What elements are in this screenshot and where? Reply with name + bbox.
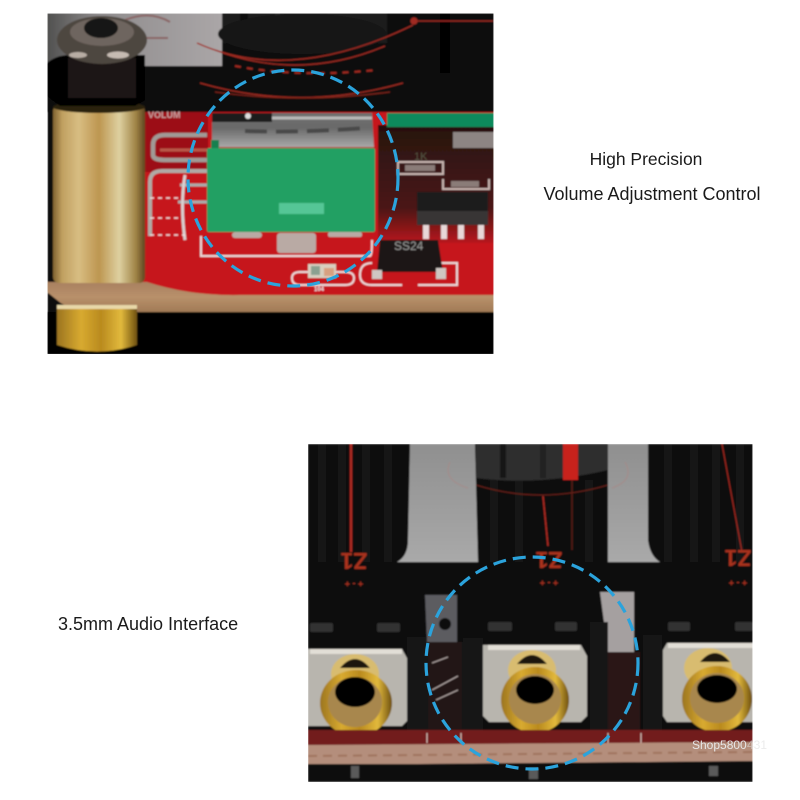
ribbed black panels xyxy=(318,444,744,562)
caption: 3.5mm audio interface: 3.5mm Audio Interface xyxy=(58,614,238,634)
caption: high precision volume adjustment control xyxy=(543,149,761,204)
black band with upside-down labels: Z1 xyxy=(535,547,562,573)
black band with upside-down labels: Z1 xyxy=(340,548,367,574)
photo: volume potentiometer on red circuit board xyxy=(47,13,494,354)
photo: 3.5mm audio jacks on circuit board xyxy=(308,444,753,782)
silk-screen outlines xyxy=(201,162,489,285)
black washer band xyxy=(47,55,145,106)
black band with upside-down labels: + - + xyxy=(345,579,363,589)
grey acrylic panel, top left xyxy=(47,13,222,69)
watermark: Shop5800 xyxy=(692,738,747,752)
dashed blue highlight circle xyxy=(426,557,638,769)
brass standoff, lower xyxy=(57,307,137,352)
grey acrylic panels xyxy=(397,444,660,562)
metal pins at the left of the potentiometer xyxy=(150,135,207,240)
knob shafts xyxy=(476,444,608,481)
black band with upside-down labels: + - + xyxy=(729,578,747,588)
jack bodies, black xyxy=(406,642,698,730)
board lettering: VOLUM xyxy=(148,110,180,120)
small smd parts on the right of the board: 1K xyxy=(414,151,428,163)
led xyxy=(308,264,336,293)
small smd parts on the right of the board xyxy=(405,132,494,239)
black band with upside-down labels xyxy=(340,548,752,588)
potentiometer metal top xyxy=(212,113,374,147)
black band with upside-down labels: + - + xyxy=(540,578,558,588)
potentiometer solder feet xyxy=(232,232,362,253)
jack left xyxy=(308,623,427,737)
watermark: 431 xyxy=(747,738,767,752)
black upper band and knob xyxy=(47,13,494,113)
gap panels behind the jacks xyxy=(425,592,634,700)
brass standoff, upper xyxy=(53,105,145,283)
black band with upside-down labels: Z1 xyxy=(724,545,751,571)
potentiometer green body xyxy=(207,148,375,232)
dashed blue highlight circle xyxy=(188,70,398,286)
screw head xyxy=(57,16,147,98)
caption: high precision volume adjustment control: Volume Adjustment Control xyxy=(543,184,761,204)
board red strip and tan edge xyxy=(308,730,753,782)
jack right xyxy=(643,622,753,732)
ss24 diode xyxy=(372,239,446,279)
red circuit board surface xyxy=(140,112,494,297)
board edge xyxy=(47,282,494,312)
led: 104 xyxy=(314,287,325,293)
jack centre xyxy=(463,622,608,737)
ss24 diode: SS24 xyxy=(394,239,424,253)
red printed marks xyxy=(351,444,742,552)
red printed scale arcs xyxy=(197,18,493,98)
caption: high precision volume adjustment control: High Precision xyxy=(590,149,702,169)
